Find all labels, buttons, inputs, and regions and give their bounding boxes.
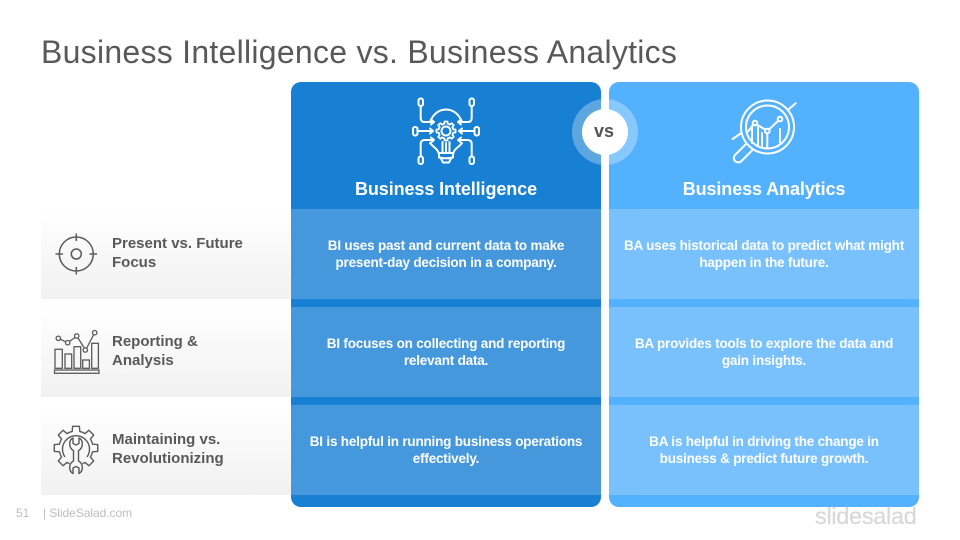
- row: Maintaining vs. Revolutionizing: [41, 405, 291, 495]
- row label: Focus: [112, 254, 156, 271]
- page number: 51: [16, 506, 29, 520]
- panel: Business Intelligence: [291, 82, 601, 507]
- panel: Business Analytics: [609, 82, 919, 507]
- heading: Business Analytics: [683, 179, 845, 199]
- cell: [609, 405, 919, 495]
- row: Present vs. Future Focus: [41, 209, 291, 299]
- icon: gear and wrench: [54, 426, 98, 474]
- cell: BA uses historical data to predict what might: [624, 238, 904, 253]
- row label: Analysis: [112, 352, 174, 369]
- footer site name: | SlideSalad.com: [43, 506, 132, 520]
- cell: happen in the future.: [699, 255, 829, 270]
- vs badge: [572, 99, 638, 165]
- cell: [291, 209, 601, 299]
- cell: [291, 405, 601, 495]
- badge centre: [582, 109, 628, 155]
- cell: BA is helpful in driving the change in: [649, 434, 879, 449]
- icon: magnifier over chart: [733, 100, 796, 162]
- row label: Maintaining vs.: [112, 431, 220, 448]
- row label: [112, 333, 198, 369]
- cell: present-day decision in a company.: [335, 255, 556, 270]
- heading: Business Intelligence: [355, 179, 537, 199]
- watermark logo: slidesalad: [815, 503, 917, 529]
- cell: [291, 307, 601, 397]
- cell: BI is helpful in running business operations: [310, 434, 582, 449]
- icon: light bulb with gear and circuits: [413, 98, 479, 164]
- icon: target crosshair: [56, 234, 97, 274]
- badge centre: vs: [594, 121, 614, 141]
- cell: business & predict future growth.: [660, 451, 868, 466]
- badge ring: [572, 99, 638, 165]
- title: Business Intelligence vs. Business Analytics: [41, 34, 677, 70]
- row label: Reporting &: [112, 333, 198, 350]
- cell: [609, 209, 919, 299]
- cell: [609, 307, 919, 397]
- cell: BI uses past and current data to make: [328, 238, 564, 253]
- cell: BI focuses on collecting and reporting: [327, 336, 565, 351]
- row label: [112, 235, 243, 271]
- cell: BA provides tools to explore the data and: [635, 336, 893, 351]
- icon: bar chart with trend line: [54, 330, 99, 373]
- row: Reporting & Analysis: [41, 307, 291, 397]
- cell: gain insights.: [722, 353, 806, 368]
- cell: effectively.: [413, 451, 479, 466]
- cell: relevant data.: [404, 353, 488, 368]
- row label: Revolutionizing: [112, 450, 224, 467]
- row label: Present vs. Future: [112, 235, 243, 252]
- row label: [112, 431, 224, 467]
